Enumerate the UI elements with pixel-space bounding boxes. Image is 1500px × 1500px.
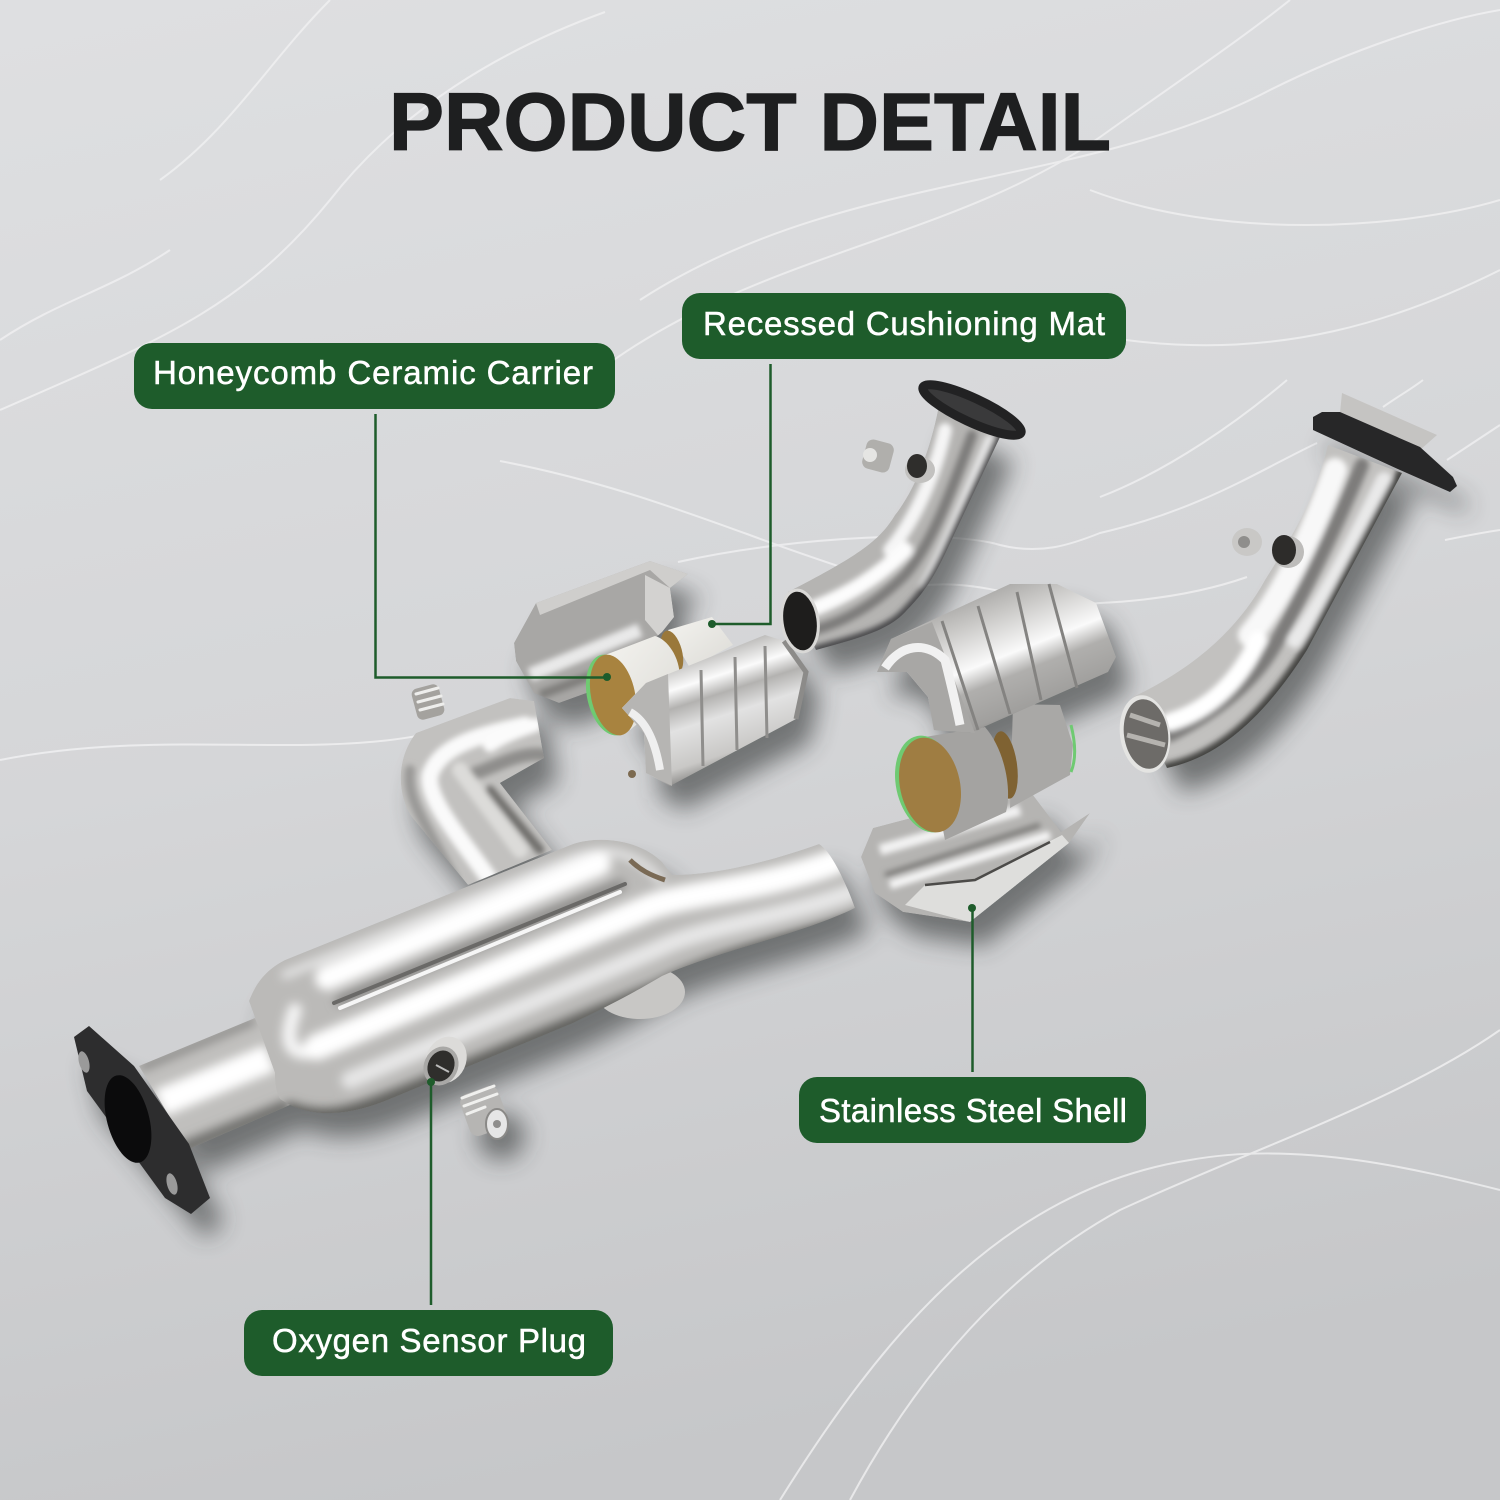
flange: [918, 376, 1026, 444]
flange: [1313, 393, 1457, 492]
ceramic face: [886, 730, 969, 838]
product: underside bulge: [595, 965, 685, 1019]
front mat: [925, 727, 1008, 840]
callout: Stainless Steel Shell: [799, 904, 1146, 1143]
callout: Recessed Cushioning Mat: Recessed Cushioning Mat: [703, 305, 1105, 342]
callout: Stainless Steel Shell: Stainless Steel Shell: [819, 1092, 1127, 1129]
inlet tube: [139, 1018, 290, 1150]
product: large converter: [861, 584, 1116, 922]
mouth: [778, 588, 822, 654]
sensor boss: [417, 1030, 474, 1091]
top plug: [410, 683, 470, 740]
closed upper shell: [877, 584, 1116, 733]
callout: Honeycomb Ceramic Carrier: [134, 343, 615, 681]
closed lower shell: [622, 635, 806, 786]
rear mat: [1010, 704, 1073, 808]
product: branch pipe with top plug: [401, 683, 552, 885]
flange: [74, 1026, 210, 1214]
mouth: [1115, 692, 1175, 776]
product: front Y-pipe: [74, 840, 860, 1214]
nut: [1232, 528, 1304, 568]
drop shadows: [88, 434, 1467, 1238]
nut: [861, 438, 935, 483]
rear mat: [668, 617, 733, 668]
body: [249, 840, 860, 1116]
channel: [334, 884, 625, 1003]
plug: [458, 1083, 510, 1139]
ceramic slice: [988, 730, 1022, 800]
open upper shell: [514, 561, 688, 703]
callout: Oxygen Sensor Plug: Oxygen Sensor Plug: [272, 1322, 586, 1359]
callout: Honeycomb Ceramic Carrier: Honeycomb Ceramic Carrier: [153, 354, 593, 391]
product: small rear pipe: [778, 376, 1026, 654]
front mat: [605, 636, 680, 730]
branch tube: [401, 698, 552, 885]
callout: Oxygen Sensor Plug: [244, 1078, 613, 1376]
rear ceramic slice: [657, 628, 687, 676]
product: small converter: [514, 561, 806, 786]
product: large rear pipe: [1115, 393, 1457, 776]
callout: Recessed Cushioning Mat: [682, 293, 1126, 628]
ceramic face: [579, 650, 643, 740]
open lower shell: [861, 795, 1090, 922]
title: PRODUCT DETAIL: [389, 77, 1111, 168]
